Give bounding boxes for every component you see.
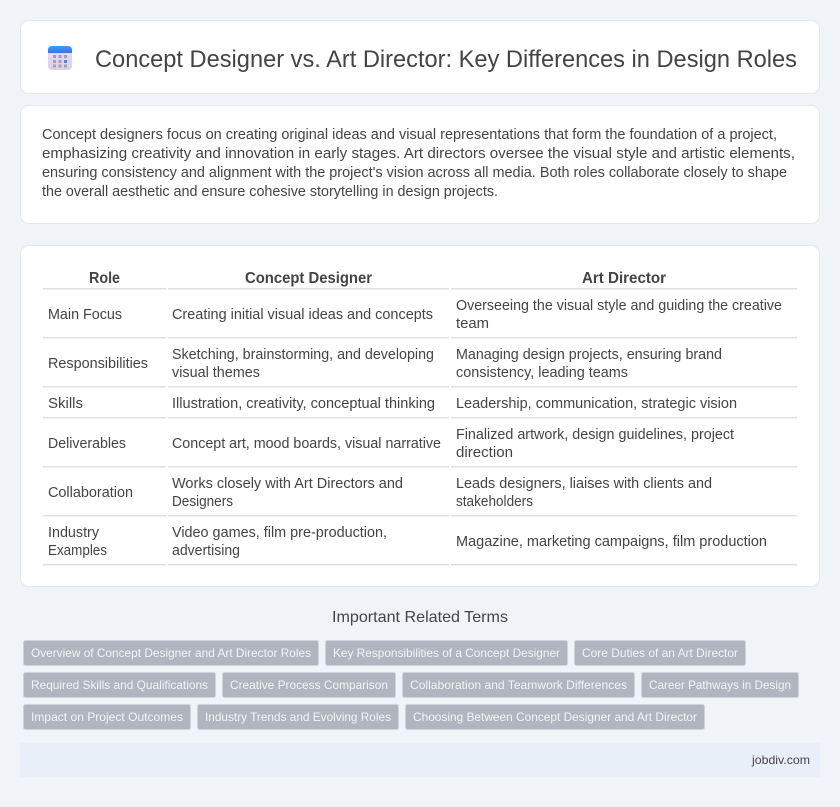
row: responsibilities: Managing design projects, ensuring brand (456, 347, 722, 363)
heading: important related terms: Important Related Terms (332, 609, 508, 626)
panel: related term tags: Career Pathways in Design (649, 678, 791, 692)
panel: related term tags: Impact on Project Outcomes (31, 710, 183, 724)
panel: intro paragraph (20, 106, 820, 224)
row: collaboration: Leads designers, liaises with clients and (456, 476, 712, 492)
row: collaboration: Collaboration (48, 485, 133, 501)
row: deliverables: Deliverables (48, 436, 126, 452)
row: collaboration: Works closely with Art Directors and (172, 476, 403, 492)
table header row: Art Director (582, 270, 666, 287)
row: main focus (48, 298, 782, 332)
icon: calendar (48, 46, 72, 70)
row: deliverables (48, 427, 734, 461)
footer: jobdiv.com (751, 753, 810, 767)
row: industry examples: Industry (48, 525, 100, 541)
panel: related term tags: Creative Process Comparison (230, 678, 388, 692)
row: responsibilities: Responsibilities (48, 356, 148, 372)
table header row (89, 270, 666, 287)
row: deliverables: Finalized artwork, design guidelines, project (456, 427, 734, 443)
panel: related term tags: Collaboration and Teamwork Differences (410, 678, 627, 692)
row: deliverables: direction (456, 445, 513, 461)
panel: related term tags: Industry Trends and Evolving Roles (205, 710, 391, 724)
table header row: Role (89, 270, 120, 287)
intro text: the overall aesthetic and ensure cohesive storytelling in design projects. (42, 184, 498, 200)
intro text: emphasizing creativity and innovation in early stages. Art directors oversee the visual style and artistic elements, (42, 146, 795, 162)
row: responsibilities (48, 347, 722, 381)
row: main focus: Main Focus (48, 307, 122, 323)
intro text: ensuring consistency and alignment with the project's vision across all media. Both roles collaborate closely to shape (42, 165, 787, 181)
row: industry examples: Video games, film pre-production, (172, 525, 387, 541)
panel: related term tags: Core Duties of an Art Director (582, 646, 738, 660)
panel: related term tags (24, 640, 798, 730)
row: industry examples (48, 525, 767, 559)
row: industry examples: advertising (172, 543, 240, 559)
intro text: Concept designers focus on creating original ideas and visual representations that form the foundation of a project, (42, 127, 777, 143)
panel: header (20, 20, 820, 94)
table header row: Concept Designer (245, 270, 372, 287)
footer (20, 743, 820, 777)
intro text (42, 127, 795, 200)
row: responsibilities: consistency, leading teams (456, 365, 628, 381)
row: main focus: Creating initial visual ideas and concepts (172, 307, 433, 323)
row: skills (48, 396, 737, 412)
row: deliverables: Concept art, mood boards, visual narrative (172, 436, 441, 452)
row: main focus: team (456, 316, 489, 332)
row: collaboration (48, 476, 712, 510)
row: skills: Leadership, communication, strategic vision (456, 396, 737, 412)
row: industry examples: Magazine, marketing campaigns, film production (456, 534, 767, 550)
panel: comparison table (20, 246, 820, 586)
row: industry examples: Examples (48, 543, 107, 559)
panel: related term tags: Choosing Between Concept Designer and Art Director (413, 710, 697, 724)
row: skills: Skills (48, 396, 83, 412)
title: Concept Designer vs. Art Director: Key Differences in Design Roles (95, 46, 797, 73)
panel: related term tags: Key Responsibilities of a Concept Designer (333, 646, 560, 660)
panel: related term tags: Overview of Concept Designer and Art Director Roles (31, 646, 311, 660)
row: collaboration: stakeholders (456, 494, 533, 510)
row: skills: Illustration, creativity, conceptual thinking (172, 396, 435, 412)
row: responsibilities: visual themes (172, 365, 260, 381)
panel: related term tags: Required Skills and Qualifications (31, 678, 208, 692)
row: collaboration: Designers (172, 494, 233, 510)
row: main focus: Overseeing the visual style and guiding the creative (456, 298, 782, 314)
row: responsibilities: Sketching, brainstorming, and developing (172, 347, 434, 363)
